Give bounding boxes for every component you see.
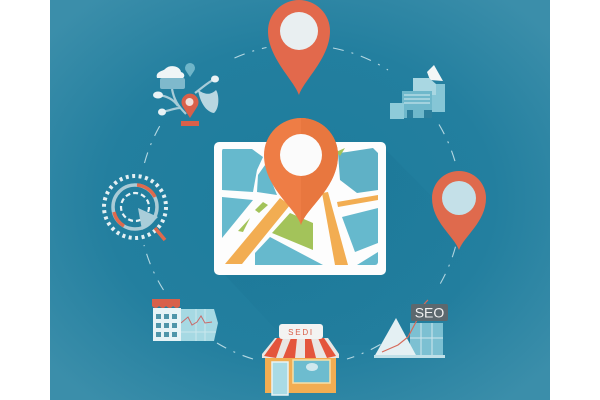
center location pin <box>264 118 338 225</box>
top location pin <box>268 0 330 95</box>
icon: SEO mountain and building <box>374 300 448 358</box>
panel: map <box>214 142 386 275</box>
map blocks <box>222 148 378 265</box>
icon: calendar with chart <box>152 299 218 341</box>
icon: cloud network <box>153 63 219 126</box>
orange roads <box>225 198 290 264</box>
map frame <box>214 142 386 275</box>
icon: storefront: SEDI <box>288 328 314 337</box>
icon: documents and buildings <box>390 65 445 119</box>
map long shadow <box>225 150 460 345</box>
icon: storefront <box>262 324 339 395</box>
icon: target with cursor <box>104 176 166 240</box>
dashed ring <box>144 48 456 359</box>
right location pin <box>432 171 486 250</box>
icon: SEO mountain and building: SEO <box>415 304 444 320</box>
green park <box>272 213 313 250</box>
